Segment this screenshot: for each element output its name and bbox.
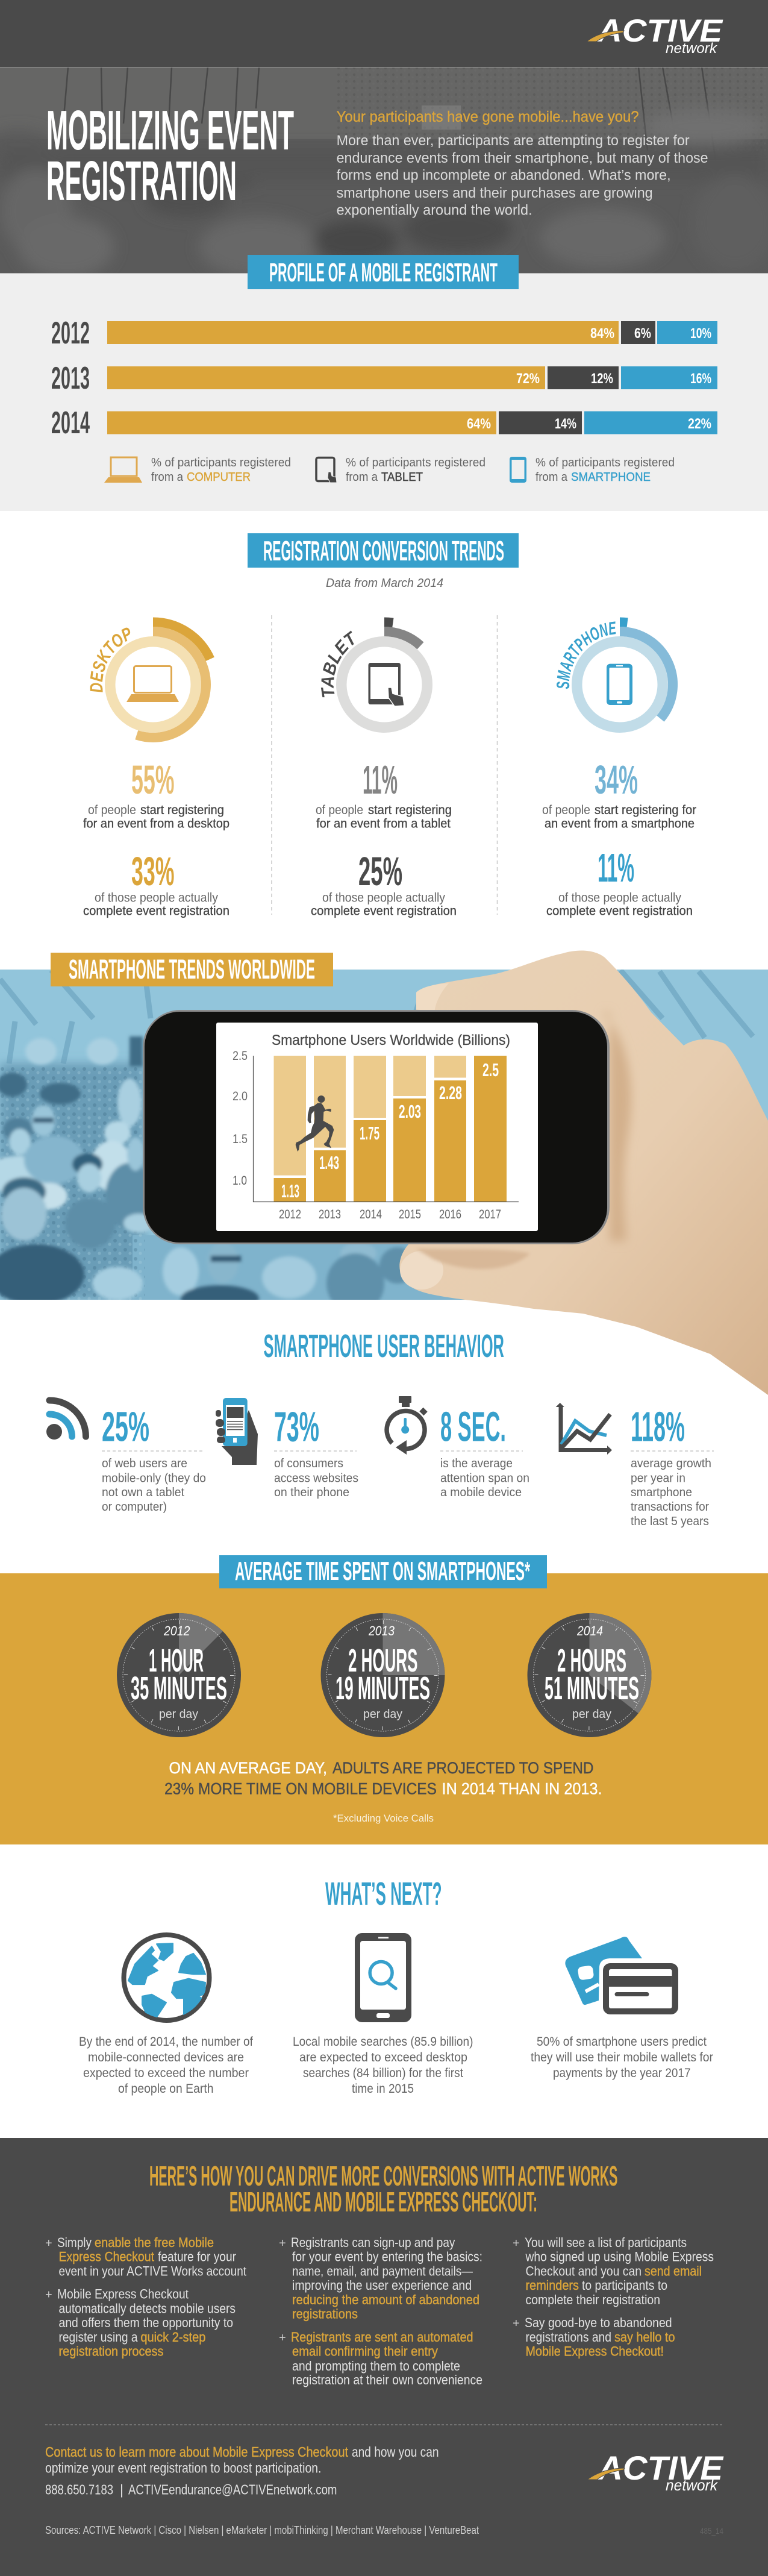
next: connected devices: mobile-connected devices are xyxy=(88,2051,244,2064)
intro text: smartphone users and their purchases are growing xyxy=(337,185,653,201)
stat: 55%: start registering xyxy=(140,803,224,817)
clock: 2014: 2 HOURS xyxy=(557,1643,626,1679)
column 3 list: say hello to xyxy=(614,2330,675,2345)
next: connected devices: of people on Earth xyxy=(118,2082,213,2096)
intro text: endurance events from their smartphone, but many of those xyxy=(337,150,708,166)
legend: tablet: from a xyxy=(346,471,378,484)
column 1 list: register using a xyxy=(59,2330,138,2345)
bar: 2012: 6% xyxy=(634,325,651,342)
next: connected devices: expected to exceed the number xyxy=(83,2066,249,2080)
stat: 55%: for an event from a desktop xyxy=(83,817,229,830)
title: REGISTRATION xyxy=(46,149,237,212)
panel: blue crowd photo xyxy=(0,970,768,1314)
next: mobile wallets: 50% of smartphone users predict xyxy=(537,2035,707,2049)
column 3 list: who signed up using Mobile Express xyxy=(525,2249,714,2264)
column 3 list: Mobile Express Checkout! xyxy=(525,2344,664,2359)
column 3 list: send email xyxy=(645,2263,702,2279)
contact text: ACTIVEendurance@ACTIVEnetwork.com xyxy=(128,2481,337,2497)
column 1 list: Mobile Express Checkout xyxy=(57,2286,189,2302)
contact text: 888.650.7183 xyxy=(45,2481,113,2497)
next: mobile searches: time in 2015 xyxy=(352,2082,414,2096)
next: mobile searches xyxy=(293,1933,473,2096)
chart title: Smartphone Users Worldwide (Billions) xyxy=(272,1032,510,1048)
column 1 list: + xyxy=(45,2289,52,2302)
legend: smartphone: % of participants registered xyxy=(535,456,675,469)
contact text: optimize your event registration to boost participation. xyxy=(45,2460,321,2475)
donut: tablet xyxy=(342,622,427,727)
clock: 2014: per day xyxy=(572,1708,611,1721)
column 2 list: for your event by entering the basics: xyxy=(292,2249,482,2264)
intro text: exponentially around the world. xyxy=(337,202,532,219)
column 2 list: registrations xyxy=(292,2307,358,2322)
clock: 2014: 2014 xyxy=(576,1623,603,1638)
stat: 8 sec: attention span on xyxy=(440,1471,529,1485)
bar: 2014: 14% xyxy=(555,416,576,432)
column 3 list: complete their registration xyxy=(525,2292,660,2307)
column 2 list: Registrants are sent an automated xyxy=(291,2330,473,2345)
logo: ACTIVE network: network xyxy=(666,40,718,57)
header bar with logo xyxy=(0,0,768,67)
stat: 73% consumers: access websites xyxy=(274,1471,358,1485)
stat: 118% xyxy=(556,1403,714,1528)
stat: 33% xyxy=(83,849,229,918)
column 3 list: to participants to xyxy=(582,2278,667,2293)
bar: 2014: 64% xyxy=(467,416,491,432)
next: connected devices xyxy=(79,1935,253,2096)
column 2 list: registration at their own convenience xyxy=(292,2372,482,2387)
bar chart: 2012 xyxy=(279,1208,301,1221)
bar chart: 1.5 xyxy=(233,1132,248,1146)
stat: 8 sec xyxy=(387,1396,529,1499)
column: smartphone xyxy=(542,617,696,918)
bar chart: 2.5 xyxy=(233,1049,248,1063)
intro text: More than ever, participants are attempting to register for xyxy=(337,133,690,149)
clock: 2012: 2012 xyxy=(163,1623,190,1638)
icon: signal xyxy=(46,1400,86,1440)
contact text xyxy=(45,2444,439,2497)
clock: 2012: 1 HOUR xyxy=(149,1643,204,1679)
bar chart: 1.0 xyxy=(233,1174,247,1188)
panel: average time spent on smartphones xyxy=(0,1555,768,1844)
bar chart xyxy=(233,1049,519,1221)
intro text: forms end up incomplete or abandoned. What’s more, xyxy=(337,168,671,184)
stat: 25% web users: or computer) xyxy=(102,1500,167,1514)
column 2 list: + xyxy=(279,2331,286,2345)
next: mobile wallets: they will use their mobile wallets for xyxy=(531,2051,713,2064)
bar: 2014: 22% xyxy=(688,416,711,432)
stat: 11%: 11% xyxy=(598,845,634,891)
column 3 list: + xyxy=(513,2317,520,2330)
column 2 list: + xyxy=(279,2237,286,2250)
column 1 list: feature for your xyxy=(158,2249,236,2264)
stat: 118%: average growth xyxy=(631,1457,711,1470)
bar: 2014: 2014 xyxy=(51,406,90,440)
banner heading: smartphone trends worldwide: SMARTPHONE TRENDS WORLDWIDE xyxy=(69,954,315,985)
column 2 list: reducing the amount of abandoned xyxy=(292,2292,479,2307)
curved label: smartphone: SMARTPHONE xyxy=(557,621,616,689)
stat: 73% consumers: on their phone xyxy=(274,1486,349,1499)
stat: 25% web users: not own a tablet xyxy=(102,1486,184,1499)
column 1 list: event in your ACTIVE Works account xyxy=(59,2263,246,2279)
legend: smartphone: SMARTPHONE xyxy=(571,471,651,484)
clock: 2013 xyxy=(320,1613,445,1737)
hand holding phone xyxy=(399,951,768,1395)
stat: 118%: per year in xyxy=(631,1471,685,1485)
clock: 2013: 2013 xyxy=(368,1623,395,1638)
clock: 2014: 51 MINUTES xyxy=(545,1670,639,1706)
legend: computer: from a xyxy=(151,471,184,484)
text: MOBILIZING EVENT xyxy=(46,99,294,161)
icon: hand holding phone xyxy=(216,1398,258,1465)
text: WHAT’S NEXT? xyxy=(325,1876,442,1912)
date note: Data from March 2014 xyxy=(326,577,443,590)
stat: 34%: start registering for xyxy=(595,803,696,817)
curved label: tablet: TABLET xyxy=(320,630,354,698)
next: mobile searches: searches (84 billion) for the first xyxy=(303,2066,463,2080)
donut: smartphone xyxy=(577,622,673,727)
clock: 2013: 19 MINUTES xyxy=(336,1670,430,1706)
curved label: desktop: DESKTOP xyxy=(90,628,130,692)
bar: 2012: 84% xyxy=(590,325,614,342)
stat: 118%: smartphone xyxy=(631,1486,692,1499)
callout statement: ON AN AVERAGE DAY, xyxy=(169,1759,327,1777)
stat: 11%: of people xyxy=(316,803,363,817)
bar chart: 1.43 xyxy=(319,1152,339,1173)
stat: 8 sec: 8 SEC. xyxy=(440,1403,506,1450)
column 2 list: and prompting them to complete xyxy=(292,2358,460,2374)
bar chart: 2015 xyxy=(399,1208,421,1221)
next: mobile searches: Local mobile searches (85.9 billion) xyxy=(293,2035,473,2049)
legend: computer: COMPUTER xyxy=(187,471,251,484)
column 2 list: improving the user experience and xyxy=(292,2278,472,2293)
column 2 list xyxy=(279,2235,482,2387)
stat: 73% consumers: 73% xyxy=(274,1403,319,1450)
clock: 2012: 35 MINUTES xyxy=(131,1670,227,1706)
bar: 2013: 12% xyxy=(591,371,613,387)
icon: globe xyxy=(124,1935,210,2021)
column 2 list: name, email, and payment details— xyxy=(292,2263,473,2279)
job code: 485_14 xyxy=(700,2526,723,2536)
column 1 list: + xyxy=(45,2237,52,2250)
banner heading: PROFILE OF A MOBILE REGISTRANT xyxy=(269,258,498,287)
stat: 73% consumers: of consumers xyxy=(274,1457,343,1470)
column 3 list: reminders xyxy=(525,2278,579,2293)
stat: 118%: the last 5 years xyxy=(631,1515,709,1528)
screen with chart xyxy=(216,1023,538,1231)
stat: 11% xyxy=(316,757,452,830)
contact text: and how you can xyxy=(352,2444,439,2460)
stat: 11%: complete event registration xyxy=(546,904,693,918)
legend: tablet: TABLET xyxy=(381,471,423,484)
intro text xyxy=(337,108,708,219)
column 1 list: quick 2-step xyxy=(140,2330,205,2345)
bar chart: 2014 xyxy=(360,1208,382,1221)
bar: 2013: 72% xyxy=(516,371,540,387)
stat: 34%: an event from a smartphone xyxy=(545,817,695,830)
next: mobile searches: are expected to exceed desktop xyxy=(299,2051,467,2064)
donut: desktop xyxy=(110,622,210,738)
bar: 2012: 10% xyxy=(690,325,711,342)
stat: 33%: 33% xyxy=(131,849,175,894)
panel: call to action footer xyxy=(0,2138,768,2576)
column 1 list: Express Checkout xyxy=(59,2249,154,2264)
clock: 2012: per day xyxy=(159,1708,198,1721)
logo: ACTIVE network: ACTIVE xyxy=(597,2449,724,2487)
heading xyxy=(149,2160,617,2217)
stat: 25%: complete event registration xyxy=(311,904,457,918)
bar chart: 2.03 xyxy=(399,1101,421,1122)
logo: ACTIVE network: network xyxy=(666,2476,719,2494)
stat: 55% xyxy=(83,757,229,830)
icon: phone with magnifier xyxy=(355,1933,411,2022)
column 3 list xyxy=(513,2235,714,2359)
icon: cards xyxy=(565,1937,678,2014)
callout statement: IN 2014 THAN IN 2013. xyxy=(442,1779,602,1797)
column 1 list: registration process xyxy=(59,2344,164,2359)
banner heading xyxy=(219,1555,547,1588)
text: SMARTPHONE USER BEHAVIOR xyxy=(264,1328,504,1364)
legend: tablet: % of participants registered xyxy=(346,456,485,469)
bar: 2012 xyxy=(51,316,717,351)
next: mobile wallets xyxy=(531,1937,713,2080)
stat: 33%: of those people actually xyxy=(95,891,218,905)
column 2 list: Registrants can sign-up and pay xyxy=(291,2235,455,2250)
icon: stopwatch xyxy=(387,1396,428,1455)
bar: 2013: 16% xyxy=(690,371,711,387)
column: tablet xyxy=(311,617,457,918)
bar chart: 2017 xyxy=(479,1208,501,1221)
clock: 2014 xyxy=(528,1613,652,1737)
column 2 list: email confirming their entry xyxy=(292,2344,438,2359)
legend: smartphone xyxy=(510,456,675,484)
stat: 11% xyxy=(546,845,693,918)
stat: 34% xyxy=(542,757,696,830)
icon: line chart xyxy=(556,1403,612,1455)
panel: registration conversion trends xyxy=(83,533,696,918)
banner heading: smartphone trends worldwide xyxy=(51,953,333,986)
title xyxy=(46,99,294,212)
bar chart: 1.75 xyxy=(360,1123,379,1144)
clock: 2013: per day xyxy=(363,1708,402,1721)
stat: 34%: 34% xyxy=(595,757,638,803)
callout statement: ADULTS ARE PROJECTED TO SPEND xyxy=(332,1759,594,1777)
bar chart: 2.0 xyxy=(233,1089,248,1103)
panel: profile of a mobile registrant xyxy=(0,255,768,511)
bar: 2012: 2012 xyxy=(51,316,90,351)
stat: 25% web users: mobile-only (they do xyxy=(102,1471,206,1485)
bar chart: 2.5 xyxy=(482,1059,499,1080)
column 3 list: registrations and xyxy=(525,2330,611,2345)
stat: 25% web users: of web users are xyxy=(102,1457,187,1470)
stat: 55%: of people xyxy=(88,803,136,817)
legend: tablet xyxy=(316,456,485,484)
callout statement: 23% MORE TIME ON MOBILE DEVICES xyxy=(164,1779,437,1797)
column: desktop xyxy=(83,617,229,918)
column 1 list: and offers them the opportunity to xyxy=(59,2315,233,2330)
bar: 2013: 2013 xyxy=(51,361,90,396)
stat: 25% xyxy=(311,849,457,918)
stat: 25%: 25% xyxy=(358,849,402,894)
bar chart: 2016 xyxy=(439,1208,461,1221)
icon: laptop xyxy=(126,666,179,702)
contact text: Contact us to learn more about Mobile Express Checkout xyxy=(45,2444,349,2460)
clock: 2013: 2 HOURS xyxy=(348,1643,418,1679)
bar chart: 2.28 xyxy=(439,1082,462,1103)
stat: 11%: start registering xyxy=(368,803,452,817)
column 3 list: Checkout and you can xyxy=(525,2263,642,2279)
bar: 2014 xyxy=(51,406,717,440)
contact text: | xyxy=(120,2481,123,2497)
stat: 11%: of those people actually xyxy=(558,891,681,905)
icon: phone xyxy=(607,664,632,705)
stat: 25%: of those people actually xyxy=(322,891,445,905)
stat: 25% web users: 25% xyxy=(102,1403,149,1450)
callout statement xyxy=(164,1759,602,1797)
banner heading xyxy=(248,533,519,568)
legend: computer xyxy=(104,456,291,484)
column 1 list xyxy=(45,2235,246,2359)
column 3 list: Say good-bye to abandoned xyxy=(525,2315,672,2330)
stat: 55%: 55% xyxy=(131,757,175,803)
stat: 73% consumers xyxy=(216,1398,358,1499)
next: mobile wallets: payments by the year 2017 xyxy=(553,2066,690,2080)
stat: 8 sec: is the average xyxy=(440,1457,513,1470)
column 3 list: You will see a list of participants xyxy=(525,2235,687,2250)
stat: 25% web users xyxy=(46,1400,206,1514)
clock: 2012 xyxy=(117,1613,241,1737)
icon: runner xyxy=(296,1095,334,1152)
phone xyxy=(143,1010,610,1244)
legend: smartphone: from a xyxy=(535,471,568,484)
stat: 118%: 118% xyxy=(631,1403,685,1450)
bar chart: 1.13 xyxy=(281,1180,299,1202)
bar: 2013 xyxy=(51,361,717,396)
column 1 list: Simply xyxy=(57,2235,92,2250)
column 1 list: automatically detects mobile users xyxy=(59,2301,236,2316)
stat: 11%: for an event from a tablet xyxy=(316,817,451,830)
next: connected devices: By the end of 2014, the number of xyxy=(79,2035,253,2049)
stat: 11%: 11% xyxy=(363,757,398,803)
icon: tablet with finger xyxy=(369,663,404,706)
logo: ACTIVE network: ACTIVE xyxy=(596,13,723,49)
bar chart: 2013 xyxy=(319,1208,341,1221)
stat: 118%: transactions for xyxy=(631,1500,709,1514)
sources: Sources: ACTIVE Network | Cisco | Nielsen | eMarketer | mobiThinking | Merchant Warehouse | VentureBeat xyxy=(45,2524,479,2536)
hero panel with darkened crowd photo xyxy=(0,67,768,277)
legend: computer: % of participants registered xyxy=(151,456,291,469)
stat: 8 sec: a mobile device xyxy=(440,1486,522,1499)
intro text: Your participants have gone mobile...have you? xyxy=(337,108,639,125)
footnote: *Excluding Voice Calls xyxy=(333,1813,434,1824)
stat: 33%: complete event registration xyxy=(83,904,229,918)
banner heading xyxy=(248,255,519,289)
column 3 list: + xyxy=(513,2237,520,2250)
stat: 34%: of people xyxy=(542,803,590,817)
column 1 list: enable the free Mobile xyxy=(95,2235,214,2250)
